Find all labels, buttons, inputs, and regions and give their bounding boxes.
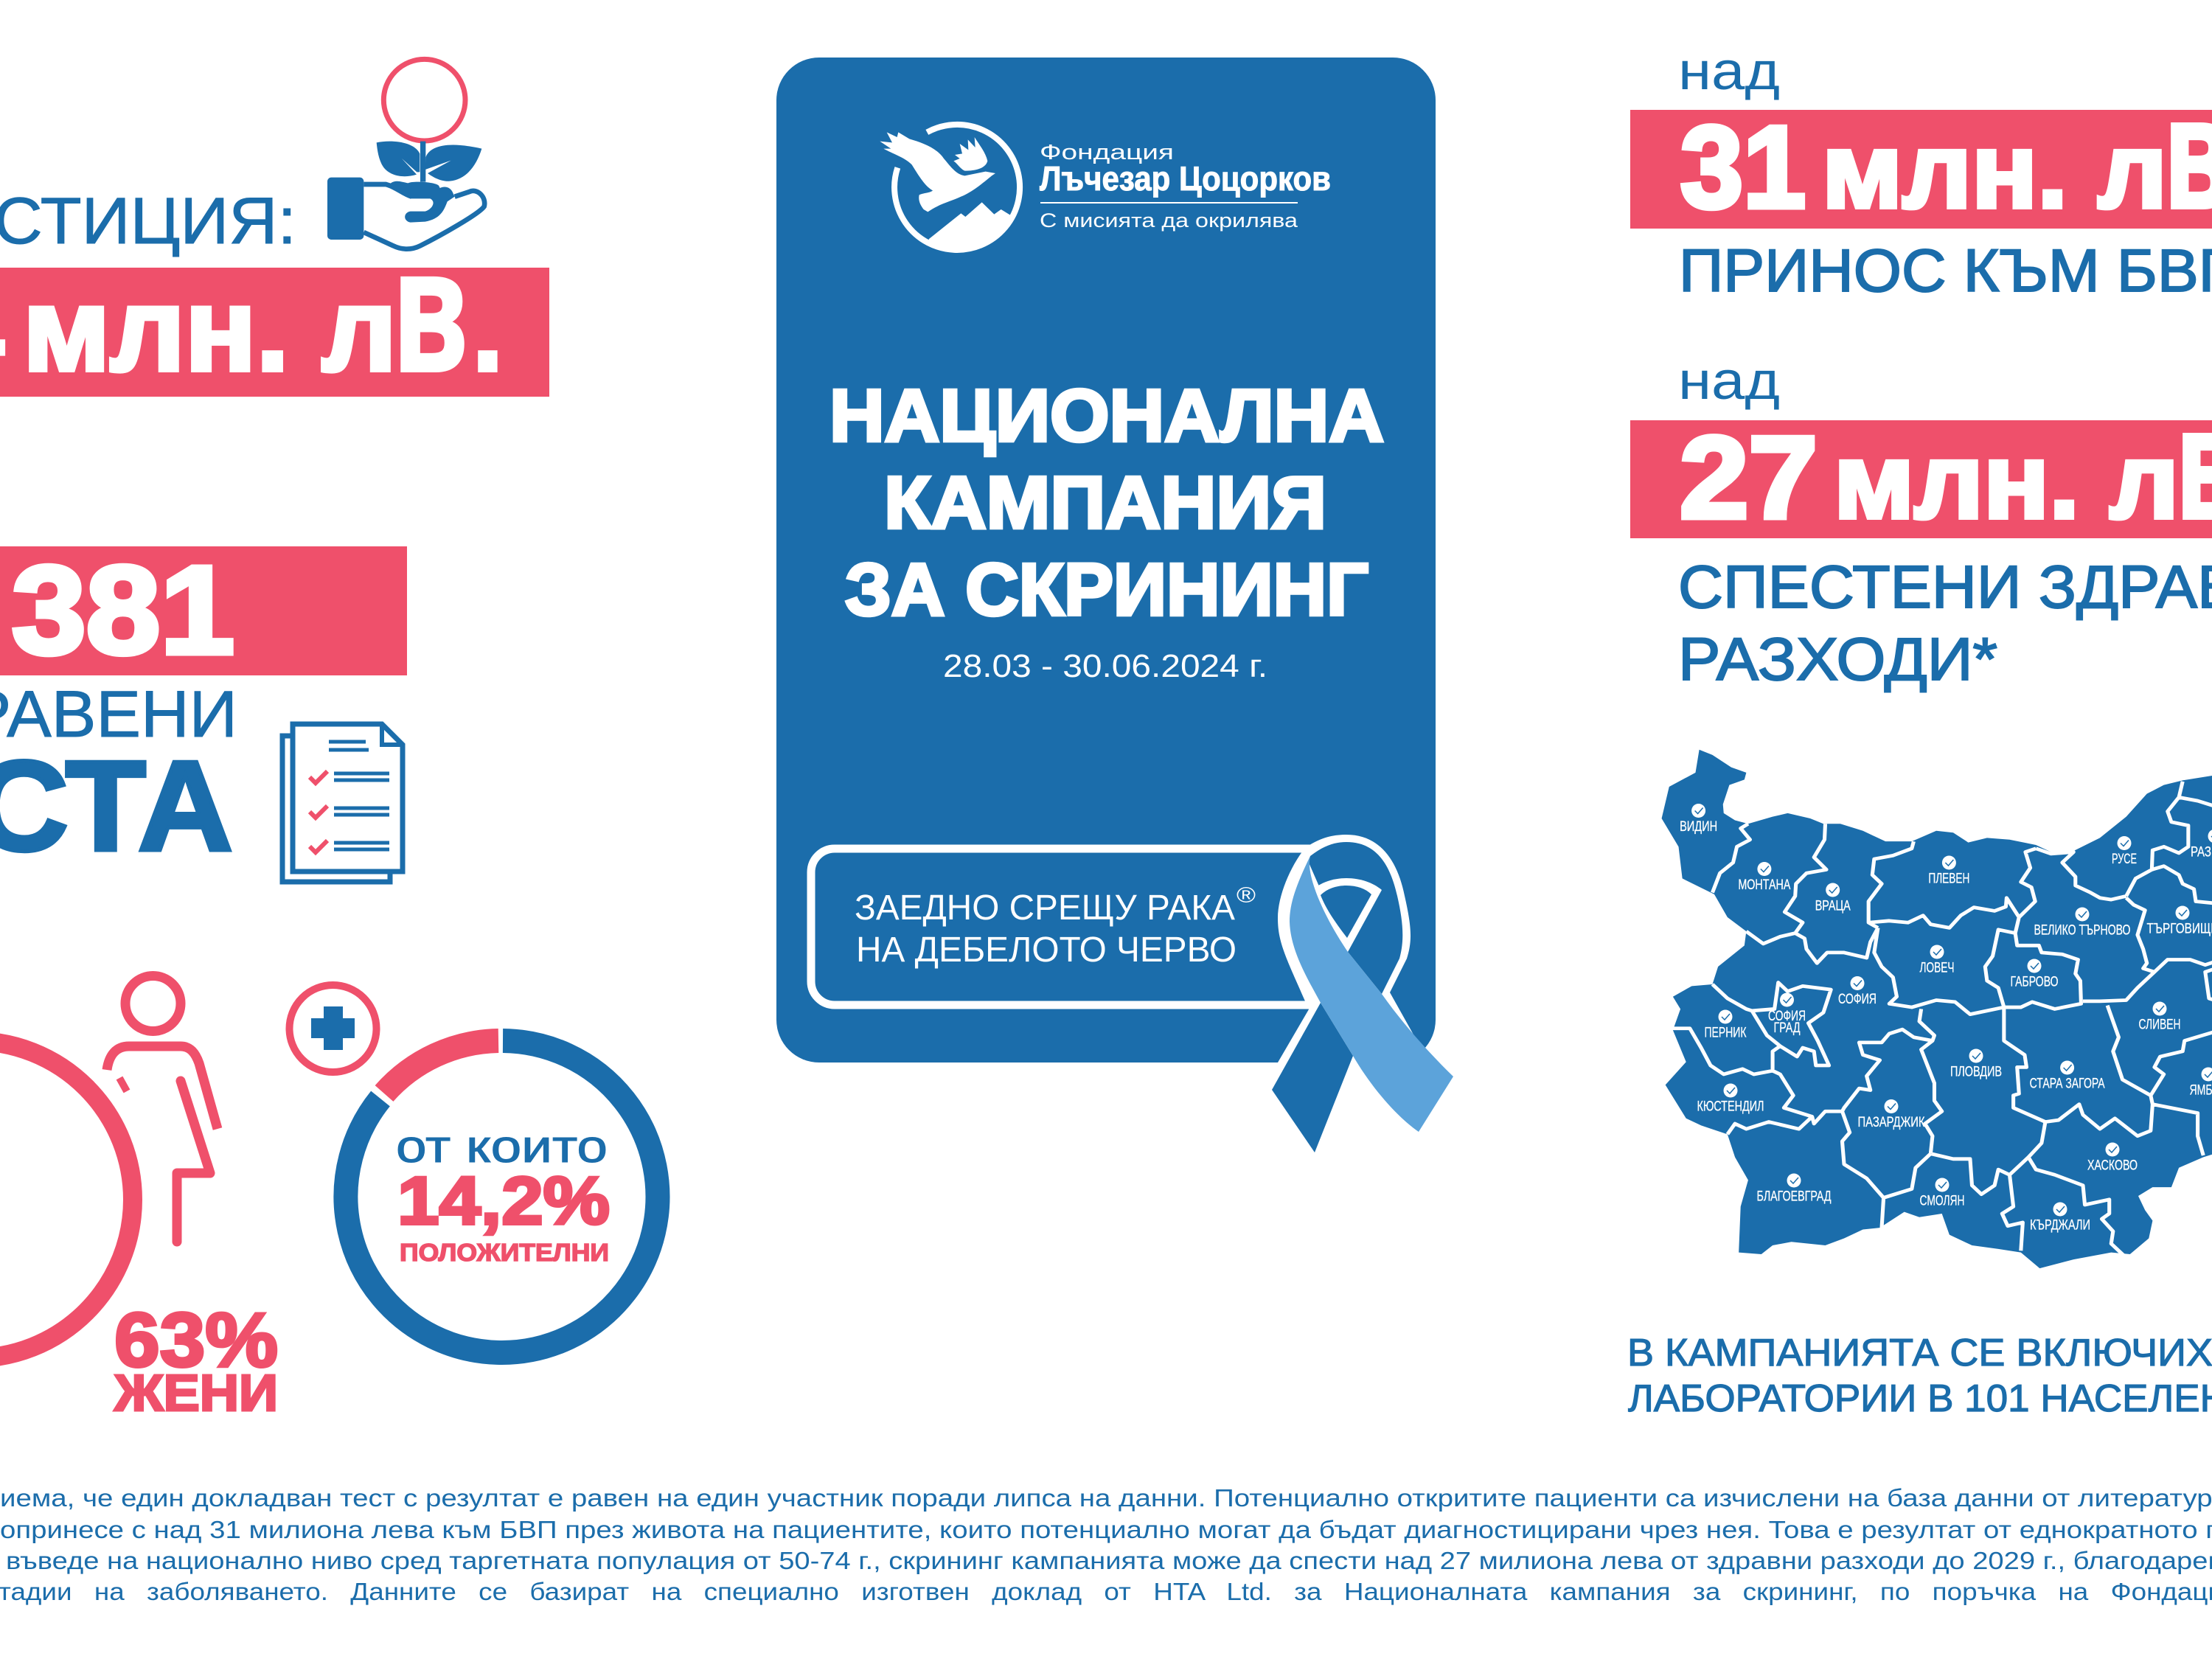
map labels: РУСЕ bbox=[2112, 852, 2137, 867]
title: ЗА СКРИНИНГ bbox=[845, 549, 1368, 631]
label: costs: РАЗХОДИ* bbox=[1678, 626, 1997, 693]
callout: together against colon cancer: НА ДЕБЕЛОТО ЧЕРВО bbox=[856, 931, 1237, 970]
map labels: СОФИЯ bbox=[1838, 992, 1877, 1007]
map labels: БЛАГОЕВГРАД bbox=[1756, 1189, 1832, 1205]
logo text: foundation: Фондация bbox=[1040, 141, 1174, 164]
pink bar: investment amount: . bbox=[473, 263, 503, 395]
panel: saved health costs bbox=[1630, 352, 2212, 693]
logo text: name: Лъчезар Цоцорков bbox=[1040, 159, 1331, 198]
chart: map of Bulgaria bbox=[1662, 750, 2212, 1268]
text: over: над bbox=[1678, 352, 1780, 411]
pink bar: investment amount bbox=[0, 213, 549, 407]
icon: medical plus bbox=[289, 985, 376, 1072]
map labels: ВЕЛИКО ТЪРНОВО bbox=[2034, 923, 2131, 938]
footnote: опринесе с над 31 милиона лева към БВП през живота на пациентите, които потенциално могат да бъдат диагностицирани чрез нея. Това е резултат от еднократното п bbox=[0, 1516, 2212, 1543]
label: women: ЖЕНИ bbox=[114, 1364, 278, 1422]
map labels: ВРАЦА bbox=[1815, 898, 1851, 914]
icon: eagle over mountains bbox=[880, 125, 1020, 250]
text: campaign coverage: В КАМПАНИЯТА СЕ ВКЛЮЧИХА bbox=[1627, 1332, 2212, 1374]
stat: 14.2 percent: 14,2% bbox=[397, 1164, 610, 1239]
pink bar: tests count bbox=[0, 540, 407, 681]
icon: hand holding plant bbox=[327, 59, 484, 249]
map labels: ПЛЕВЕН bbox=[1928, 872, 1969, 886]
title bbox=[830, 375, 1384, 631]
map labels: ПЛОВДИВ bbox=[1950, 1065, 2002, 1079]
map regions bbox=[1662, 750, 2212, 1268]
footnote: въведе на национално ниво сред таргетната популация от 50-74 г., скрининг кампанията може да спести над 27 милиона лева от здравни разходи до 2029 г., благодарение bbox=[6, 1547, 2212, 1574]
panel: tests performed bbox=[0, 540, 407, 882]
pink bar: 31 million: млн. л bbox=[1822, 111, 2167, 230]
date: 28.03 - 30.06.2024 г. bbox=[943, 648, 1267, 684]
icon: checklist document bbox=[282, 724, 403, 882]
panel: positive results bbox=[289, 985, 658, 1352]
icon: woman figure bbox=[107, 976, 218, 1242]
map labels bbox=[1680, 804, 2212, 1233]
pink bar: investment amount: млн. л bbox=[23, 263, 397, 395]
map labels: ПАЗАРДЖИК bbox=[1858, 1115, 1924, 1130]
logo text: tagline: С мисията да окрилява bbox=[1040, 209, 1298, 232]
map labels: СЛИВЕН bbox=[2139, 1018, 2180, 1032]
map labels: ХАСКОВО bbox=[2087, 1158, 2138, 1174]
logo: foundation bbox=[880, 125, 1331, 250]
text: campaign coverage bbox=[1627, 1332, 2212, 1420]
map labels: СМОЛЯН bbox=[1919, 1193, 1965, 1209]
footnote bbox=[0, 1484, 2212, 1605]
title: НАЦИОНАЛНА bbox=[830, 375, 1384, 457]
pink bar: tests count: 381 bbox=[12, 540, 234, 681]
callout: together against colon cancer: ® bbox=[1237, 883, 1256, 908]
map labels: СТАРА ЗАГОРА bbox=[2030, 1077, 2105, 1091]
icon: awareness ribbon bbox=[1272, 835, 1453, 1152]
text: of whom: от които bbox=[396, 1121, 608, 1172]
pink bar: 27 million: 27 bbox=[1680, 413, 1818, 543]
map labels: ЛОВЕЧ bbox=[1920, 960, 1954, 976]
map labels: КЪРДЖАЛИ bbox=[2030, 1218, 2090, 1233]
callout: together against colon cancer bbox=[811, 849, 1342, 1005]
chart: women ring bbox=[0, 1041, 133, 1358]
text: over: над bbox=[1678, 42, 1780, 101]
pink bar: investment amount: в bbox=[394, 213, 467, 407]
title: КАМПАНИЯ bbox=[884, 462, 1326, 544]
pink bar: 27 million bbox=[1630, 376, 2212, 551]
panel: women share bbox=[0, 976, 278, 1422]
map labels: ПЕРНИК bbox=[1705, 1025, 1746, 1041]
map labels: ГАБРОВО bbox=[2010, 975, 2059, 990]
pink bar: 31 million: 31 bbox=[1680, 102, 1806, 232]
pink bar: 27 million: млн. л bbox=[1834, 422, 2179, 540]
callout: together against colon cancer: ЗАЕДНО СРЕЩУ РАКА bbox=[855, 888, 1235, 928]
label: positive: ПОЛОЖИТЕЛНИ bbox=[400, 1239, 609, 1266]
pink bar: 31 million bbox=[1630, 66, 2212, 240]
map labels: ГРАД bbox=[1774, 1020, 1801, 1036]
panel: central campaign card bbox=[776, 58, 1453, 1152]
map labels: ВИДИН bbox=[1680, 819, 1717, 835]
panel: GDP contribution bbox=[1630, 42, 2212, 305]
footnote: иема, че един докладван тест с резултат е равен на един участник поради липса на данни. Потенциално откритите пациенти са изчислени на база данни от литература bbox=[0, 1484, 2212, 1512]
panel: investment bbox=[0, 59, 549, 407]
footnote: тадии на заболяването. Данните се базират на специално изготвен доклад от HTA Ltd. за Националната кампания за скрининг, по поръчка на Фондация bbox=[0, 1578, 2212, 1605]
stat: 63 percent: 63% bbox=[114, 1298, 278, 1383]
chart: positive share donut bbox=[346, 1041, 658, 1352]
map labels: КЮСТЕНДИЛ bbox=[1697, 1099, 1764, 1115]
map labels: СОФИЯ bbox=[1768, 1009, 1806, 1024]
map labels: МОНТАНА bbox=[1738, 877, 1791, 893]
